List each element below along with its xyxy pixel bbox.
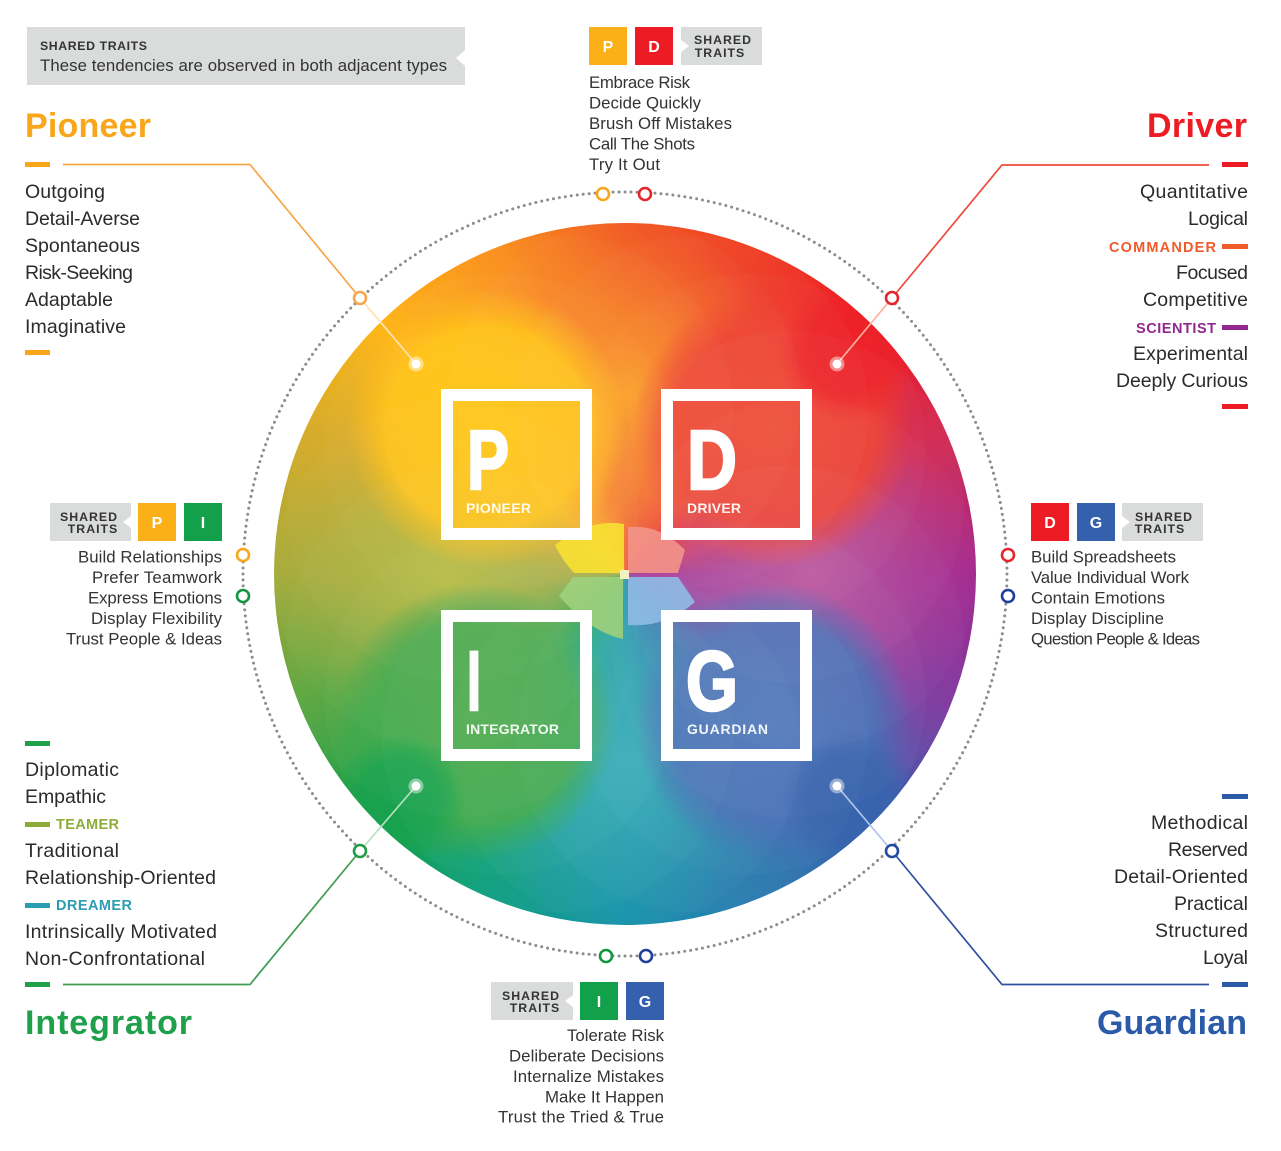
trait list: Driver: Competitive (1143, 289, 1248, 311)
panel: Guardian (1097, 794, 1248, 1042)
trait list: Guardian: Structured (1155, 920, 1248, 942)
heading: Guardian: Guardian (1097, 1004, 1247, 1042)
trait list: Driver: Deeply Curious (1116, 370, 1248, 392)
box: Guardian: GUARDIAN (687, 721, 768, 737)
rosette pattern (232, 181, 1018, 967)
connector: Driver (830, 165, 1209, 372)
shared traits: D and G: Display Discipline (1031, 609, 1164, 628)
shared traits: D and G (1002, 503, 1203, 648)
trait list: Integrator: Traditional (25, 840, 119, 862)
shared traits: I and G: Trust the Tried & True (498, 1108, 664, 1126)
shared traits: P and I: P (152, 515, 163, 532)
trait list: Integrator: Diplomatic (25, 759, 119, 781)
shared traits: P and D: P (603, 39, 614, 56)
shared traits: I and G (491, 950, 665, 1126)
trait list: Guardian: Detail-Oriented (1114, 866, 1248, 888)
trait list: Integrator: Non-Confrontational (25, 948, 205, 970)
trait list: Driver: Quantitative (1140, 181, 1248, 203)
shared traits: D and G: D (1044, 515, 1056, 532)
shared traits: I and G: I (597, 994, 601, 1011)
trait list: Integrator: TEAMER (56, 817, 120, 833)
trait list: Driver: COMMANDER (1109, 240, 1217, 256)
trait list: Integrator: DREAMER (56, 898, 133, 914)
shared traits: D and G: Value Individual Work (1031, 568, 1190, 587)
shared traits: D and G: Contain Emotions (1031, 588, 1165, 608)
trait list: Pioneer (25, 181, 140, 338)
shared traits: D and G: SHARED (1135, 510, 1193, 524)
shared traits: I and G: Make It Happen (545, 1088, 664, 1106)
shared traits: I and G: Internalize Mistakes (513, 1067, 664, 1086)
shared traits: P and I: Prefer Teamwork (92, 568, 223, 587)
shared traits: P and I: Build Relationships (78, 548, 222, 566)
shared traits: P and I: SHARED (60, 510, 118, 524)
shared traits: I and G: Deliberate Decisions (509, 1046, 664, 1066)
box: Pioneer (447, 395, 586, 534)
shared traits: P and I: Express Emotions (88, 588, 222, 608)
connector: Guardian (830, 778, 1209, 984)
box: Pioneer: P (467, 413, 509, 507)
trait list: Guardian: Loyal (1203, 947, 1248, 969)
trait list: Pioneer: Adaptable (25, 289, 113, 311)
shared traits: P and D: Brush Off Mistakes (589, 114, 732, 133)
shared traits: I and G: G (639, 994, 651, 1011)
trait list: Pioneer: Risk-Seeking (25, 262, 133, 284)
heading: Integrator: Integrator (25, 1004, 192, 1042)
box: Guardian: G (686, 634, 738, 728)
shared traits: P and I: I (201, 515, 205, 532)
trait list: Driver: Experimental (1133, 343, 1248, 365)
dotted ring (243, 192, 1007, 956)
trait list: Pioneer: Outgoing (25, 181, 105, 203)
shared traits: P and D: Decide Quickly (589, 94, 702, 112)
trait list: Guardian (1114, 812, 1248, 969)
shared traits: P and I: Trust People & Ideas (66, 630, 222, 648)
connector: Pioneer (63, 164, 424, 372)
panel: Pioneer (25, 107, 151, 355)
shared traits: I and G: SHARED (502, 989, 560, 1003)
shared traits: I and G: Tolerate Risk (567, 1026, 665, 1045)
trait list: Integrator: Intrinsically Motivated (25, 921, 217, 943)
colour blobs (324, 254, 933, 868)
trait list: Integrator: Empathic (25, 786, 106, 808)
shared traits: P and D: D (648, 39, 660, 56)
trait list: Driver: SCIENTIST (1136, 321, 1217, 337)
shared traits: P and D: SHARED (694, 33, 752, 47)
box: Driver: DRIVER (687, 500, 741, 516)
heading: Driver: Driver (1147, 107, 1247, 145)
box: Pioneer: PIONEER (466, 500, 531, 516)
trait list: Pioneer: Imaginative (25, 316, 126, 338)
panel: Driver (1109, 107, 1248, 409)
shared traits: P and D: Try It Out (589, 155, 660, 174)
panel: Integrator (25, 741, 217, 1042)
shared traits: D and G: G (1090, 515, 1102, 532)
trait list: Guardian: Reserved (1168, 839, 1248, 861)
trait list: Guardian: Methodical (1151, 812, 1248, 834)
trait list: Pioneer: Detail-Averse (25, 208, 140, 230)
trait list: Pioneer: Spontaneous (25, 235, 140, 257)
shared traits: D and G: TRAITS (1135, 522, 1185, 536)
shared traits: D and G: Build Spreadsheets (1031, 548, 1176, 566)
box: Integrator (447, 616, 586, 755)
centre petals (555, 523, 695, 639)
trait list: Integrator (25, 759, 217, 970)
legend: shared traits (27, 27, 465, 85)
shared traits: P and D: Embrace Risk (589, 73, 691, 92)
color wheel base (274, 223, 976, 925)
connector: Integrator (63, 778, 424, 984)
legend: shared traits: SHARED TRAITS (40, 39, 148, 53)
trait list: Driver: Logical (1188, 208, 1248, 230)
legend: shared traits: These tendencies are observed in both adjacent types (40, 56, 447, 75)
shared traits: D and G: Question People & Ideas (1031, 630, 1200, 648)
trait list: Guardian: Practical (1174, 893, 1248, 915)
shared traits: P and I (50, 503, 249, 648)
trait list: Driver: Focused (1176, 262, 1248, 284)
box: Driver (667, 395, 806, 534)
shared traits: P and D: TRAITS (695, 46, 745, 60)
heading: Pioneer: Pioneer (25, 107, 151, 145)
trait list: Integrator: Relationship-Oriented (25, 867, 216, 889)
shared traits: P and D: Call The Shots (589, 134, 695, 154)
shared traits: P and D (589, 27, 762, 200)
trait list: Driver (1109, 181, 1248, 392)
box: Driver: D (687, 413, 737, 507)
shared traits: P and I: TRAITS (68, 522, 118, 536)
shared traits: P and I: Display Flexibility (91, 609, 223, 628)
box: Integrator: I (467, 634, 481, 728)
box: Integrator: INTEGRATOR (466, 721, 559, 737)
shared traits: I and G: TRAITS (510, 1001, 560, 1015)
box: Guardian (667, 616, 806, 755)
